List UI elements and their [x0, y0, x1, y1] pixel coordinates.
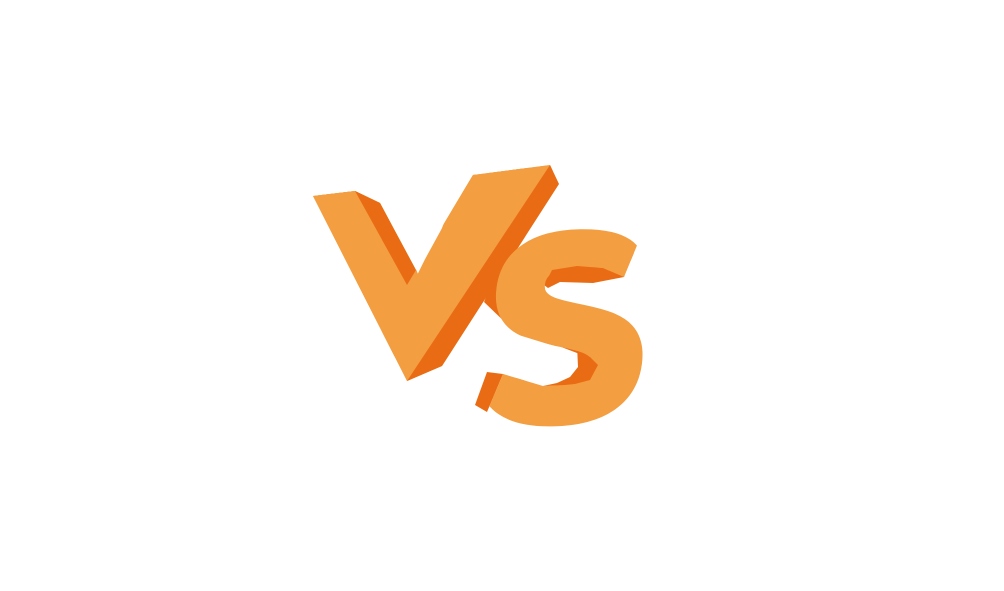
letter V	[313, 165, 559, 381]
letter V: V	[316, 131, 523, 356]
letter V: V	[311, 103, 555, 455]
letter S: S	[462, 181, 670, 474]
letter V: V	[297, 73, 541, 425]
versus emblem	[313, 165, 643, 426]
letter S	[475, 229, 643, 426]
